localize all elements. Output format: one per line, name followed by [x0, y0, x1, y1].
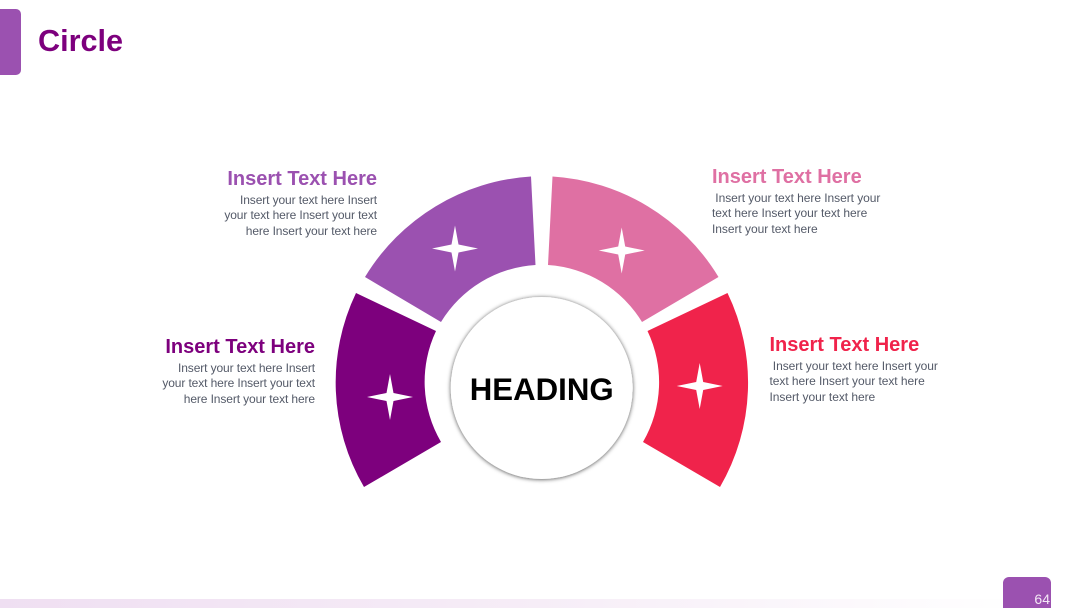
segment: pink — [548, 176, 718, 322]
dark purple body: Insert your text here Insert your text here Insert your text here Insert your text here — [162, 360, 315, 406]
footer gradient band — [0, 599, 1080, 608]
purple heading: Insert Text Here — [227, 168, 377, 190]
title: Circle — [38, 24, 123, 58]
center circle — [451, 297, 633, 479]
dark purple heading: Insert Text Here — [165, 336, 315, 358]
red heading: Insert Text Here — [770, 334, 919, 356]
purple body: Insert your text here Insert your text here Insert your text here Insert your text here — [224, 192, 377, 238]
text block: red — [770, 334, 938, 404]
text block: purple — [224, 168, 377, 238]
red body: Insert your text here Insert your text here Insert your text here Insert your text here — [770, 358, 938, 404]
icon: star red — [677, 363, 723, 409]
segment: red — [643, 293, 748, 487]
icon: star pink — [599, 228, 645, 274]
text block: dark purple — [162, 336, 315, 406]
pink body: Insert your text here Insert your text here Insert your text here Insert your text here — [712, 190, 880, 236]
center heading: HEADING — [470, 372, 614, 407]
icon: star dark purple — [367, 374, 413, 420]
page number tab: 64 — [1034, 591, 1050, 607]
icon: star purple — [432, 226, 478, 272]
header accent tab — [0, 9, 21, 75]
page number tab — [1003, 577, 1051, 608]
text block: pink — [712, 166, 880, 236]
segment: purple — [365, 176, 536, 322]
pink heading: Insert Text Here — [712, 166, 862, 188]
segment: dark purple — [336, 293, 441, 487]
